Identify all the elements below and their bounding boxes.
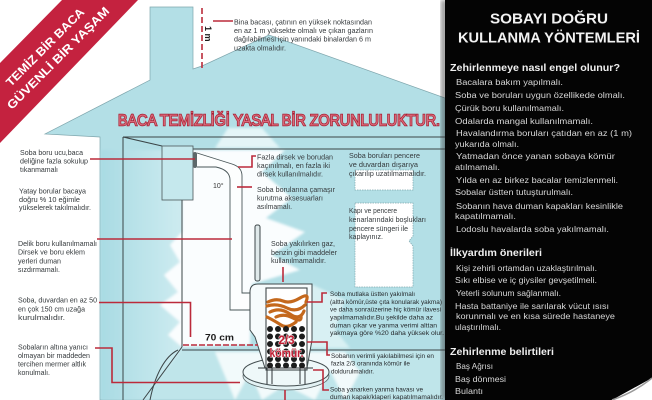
section: prevention: Yatmadan önce yanan sobaya kömür [456,151,615,161]
callouts: left: Yatay borular bacaya [19,186,86,196]
callouts: left: deliğine fazla sokulup [20,156,88,166]
coal label: 2/3 [278,335,294,347]
callouts: middle: Soba yakılırken gaz, [271,239,335,248]
callouts: left: en çok 150 cm uzağa [18,304,85,313]
damper rod [255,225,260,281]
window opening top [355,170,413,190]
red callout lines [90,8,330,400]
stove base [243,358,329,390]
coal [267,326,305,368]
callouts: left: yerleri duman [18,256,61,265]
section: first aid: Sıkı elbise ve iç giysiler gevşetilmeli. [455,275,597,285]
section: prevention: atılmamalı. [455,162,500,172]
callouts: left: yükselerek takılmalıdır. [19,203,91,212]
section: symptoms: Baş dönmesi [455,374,506,384]
callouts: stove: fazla 2/3 oranında kömür ile [331,360,410,368]
callouts: left: konulmalı. [18,368,50,377]
section: prevention: Lodoslu havalarda soba yakılmamalı. [456,224,609,234]
page curl [612,378,652,400]
callouts: left: Soba, duvardan en az 50 [18,296,97,305]
callouts: left: Delik boru kullanılmamalı [18,239,97,248]
callouts: left: Dirsek ve boru eklem [18,248,85,257]
pipe angle: 10° [213,182,224,190]
callouts: middle: kullanılmamalıdır. [271,256,326,265]
callout: chimney height: en az 1 m yüksekte olmalı ve çıkan gazların [234,26,373,35]
section: first aid: Kişi zehirli ortamdan uzaklaştırılmalı. [456,263,597,273]
section: prevention: Odalarda mangal kullanılmamalı. [455,116,593,126]
callout: chimney height: uzakta olmalıdır. [234,43,286,52]
callout: chimney height: Bina bacası, çatının en yüksek noktasından [234,17,372,26]
section: symptoms: Baş Ağrısı [456,361,493,371]
flue box [162,146,193,200]
callouts: windows: pencere süngeri ile [349,224,408,233]
callouts: middle: asılmamalı. [257,202,292,211]
callouts: stove: Soba mutlaka üstten yakılmalı [330,291,415,298]
callouts: middle: Fazla dirsek ve borudan [257,152,333,162]
interior glow [101,128,445,400]
callouts: windows: Kapı ve pencere [349,206,397,215]
callouts: stove: doldurulmalıdır. [331,368,374,376]
section: first aid: ulaştırılmalı. [455,322,501,332]
callouts: stove [330,291,444,400]
section: first aid: Hasta battaniye ile sarılarak vücut ısısı [455,301,609,311]
callouts: left: tercihen mermer altlık [18,359,86,368]
callouts: windows: ve duvardan dışarıya [349,160,418,169]
diagonal banner: GÜVENLİ BİR YAŞAM [3,3,112,112]
measure: 70 cm: 70 cm [205,332,234,342]
diagonal banner [0,0,138,143]
panel title [458,10,640,47]
callouts: windows: kaplayınız. [349,232,383,241]
callouts: left: doğru % 10 eğimle [19,195,80,204]
section: prevention: Sobalar üstten tutuşturulmalı. [455,187,573,197]
stove pipe [193,152,250,310]
callouts: stove: Soba yanarken yanma havası ve [330,386,423,394]
section: prevention: Havalandırma boruları çatıdan en az (1 m) [456,128,632,138]
section: prevention: yukarıda olmalı. [455,139,519,149]
coal label: kömür. [270,348,304,360]
section: symptoms: Zehirlenme belirtileri [450,346,554,358]
window opening [355,203,413,287]
section: prevention: Çürük boru kullanılmamalı. [455,103,564,113]
flames [267,296,307,326]
diagonal banner: TEMİZ BİR BACA [2,4,87,89]
measure: 1 m: 1 m [203,26,213,42]
callouts: stove: yakmaya göre %20 daha yüksek olur. [330,330,444,337]
callout: chimney height [234,17,373,52]
section: prevention: kapatılmamalı. [455,211,516,221]
panel: usage guide [441,0,652,400]
panel title: SOBAYI DOĞRU [490,10,608,28]
callouts: middle: benzin gibi maddeler [271,248,338,257]
house illustration [45,7,445,400]
callouts: middle: dirsek kullanılmalıdır. [257,170,323,179]
callouts: left [18,148,97,377]
section: symptoms [450,346,554,396]
headline: BACA TEMİZLİĞİ YASAL BİR ZORUNLULUKTUR. [118,112,440,130]
callouts: left: Soba boru ucu,baca [20,148,83,157]
callouts: middle: kaçınılmalı, en fazla iki [257,161,330,170]
room outline [123,137,445,400]
section: first aid: korunmalı ve en kısa sürede hastaneye [456,311,615,321]
section: prevention: Sobanın hava duman kapakları kesinlikle [456,201,623,211]
callouts: middle [257,152,338,265]
callouts: middle: Soba borularına çamaşır [257,185,336,194]
callouts: windows: çıkarılıp uzatılmamalıdır. [349,169,426,178]
callouts: windows [349,151,426,241]
section: prevention: Bacalara bakım yapılmalı. [456,77,563,87]
section: first aid [450,246,615,332]
callouts: stove: (altta kömür,üste çıta konularak yakma) [330,299,442,306]
section: first aid: İlkyardım önerileri [450,246,542,259]
callouts: stove: ve daha sonraüzerine hiç kömür ilavesi [330,306,441,314]
callouts: windows: kenarlarındaki boşlukları [349,215,426,224]
panel title: KULLANMA YÖNTEMLERİ [458,30,640,47]
house silhouette [45,7,445,400]
callouts: stove: Sobanın verimli yakılabilmesi için en [331,353,434,360]
section: prevention [450,62,632,234]
callouts: middle: kurutma aksesuarları [257,194,323,202]
callouts: windows: Soba boruları pencere [349,151,420,160]
section: prevention: Yılda en az birkez bacalar temizlenmeli. [456,175,618,185]
section: first aid: Yeterli solunum sağlanmalı. [456,288,561,298]
section: prevention: Soba ve boruları uygun özellikede olmalı. [455,90,625,100]
callouts: stove: yapılmamalıdır.Bu şekilde daha az [330,314,433,322]
callout: chimney height: dağılabilmesi için yanındaki binalardan 6 m [234,35,371,44]
callouts: stove: duman çıkar ve yanma verimi alttan [330,322,438,330]
callouts: left: olmayan bir maddeden [18,351,90,360]
callouts: left: kurulmalıdır. [18,313,65,322]
stove [250,284,313,384]
section: symptoms: Bulantı [455,386,483,396]
callouts: left: Sobaların altına yanıcı [18,342,88,351]
coal label [270,335,304,360]
callouts: left: tıkanmamalı [20,165,58,174]
section: prevention: Zehirlenmeye nasıl engel olunur? [450,62,620,74]
callouts: left: sızdırmamalı. [18,265,60,274]
